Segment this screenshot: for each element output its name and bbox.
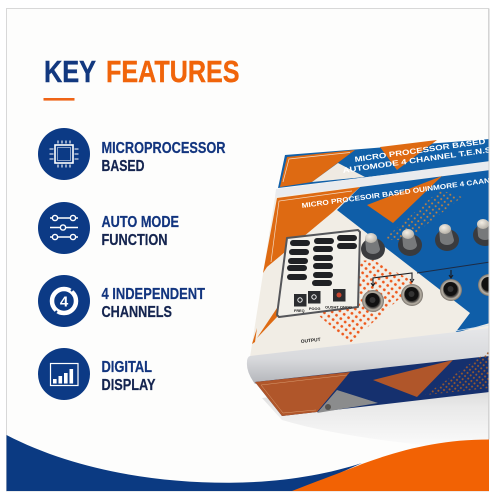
device: silver strip between panels bbox=[275, 161, 490, 197]
main panel text: MICRO PROCESOIR BASED OUINMORE 4 CAAN bbox=[301, 178, 491, 210]
title: KEY bbox=[44, 54, 96, 89]
feature: digital display bbox=[38, 348, 156, 400]
label: 4 independent channels bbox=[102, 286, 205, 321]
output label: OUTPUT bbox=[301, 337, 321, 345]
icon: chip bbox=[38, 128, 90, 180]
icon: display with bars bbox=[38, 348, 90, 400]
arrow: bracket to jacks bbox=[371, 270, 453, 286]
device bbox=[247, 137, 500, 416]
keypad button labels: OUSHT ONOO bbox=[325, 306, 352, 310]
bottom wave: orange bbox=[292, 440, 489, 491]
label: 4 independent channels: 4 INDEPENDENT bbox=[102, 286, 205, 303]
label: 4 independent channels: CHANNELS bbox=[102, 304, 172, 321]
icon: four in ring bbox=[38, 275, 90, 327]
keypad button labels: FREQ bbox=[294, 309, 305, 313]
label: microprocessor based bbox=[102, 140, 226, 175]
label: auto mode function: FUNCTION bbox=[102, 232, 168, 249]
bottom wave: blue bbox=[6, 435, 362, 491]
label: microprocessor based: MICROPROCESSOR bbox=[102, 140, 226, 157]
label: digital display: DIGITAL bbox=[102, 359, 152, 376]
label: digital display: DISPLAY bbox=[102, 377, 156, 394]
label: microprocessor based: BASED bbox=[102, 158, 144, 175]
feature: microprocessor bbox=[38, 128, 226, 180]
screw bbox=[325, 404, 331, 410]
keypad button labels bbox=[294, 306, 352, 313]
device: front face bbox=[255, 350, 490, 416]
right card edge bbox=[488, 8, 490, 440]
device: output jacks bbox=[362, 274, 500, 312]
title underline bbox=[44, 98, 74, 101]
icon: four in ring: 4 bbox=[60, 294, 69, 310]
keypad square buttons bbox=[294, 289, 346, 306]
floor shadow under device bbox=[262, 392, 488, 434]
device: knobs bbox=[361, 219, 497, 260]
device: keypad bbox=[277, 230, 360, 317]
icon: sliders bbox=[38, 202, 90, 254]
label: auto mode function bbox=[102, 214, 179, 249]
feature: auto mode bbox=[38, 202, 179, 254]
device: top control face bbox=[250, 170, 491, 357]
feature: channels bbox=[38, 275, 205, 327]
label: digital display bbox=[102, 359, 156, 394]
label: auto mode function: AUTO MODE bbox=[102, 214, 179, 231]
rear panel text: MICRO PROCESSOR BASED bbox=[354, 137, 487, 164]
device: front silver edge bbox=[247, 328, 490, 384]
rear panel text: AUTOMODE 4 CHANNEL T.E.N.S bbox=[342, 145, 492, 175]
device: rear display panel bbox=[278, 137, 492, 188]
title: FEATURES bbox=[106, 54, 240, 89]
rear panel text bbox=[343, 140, 488, 173]
keypad button labels: POOG bbox=[309, 307, 320, 311]
title bbox=[44, 54, 240, 89]
